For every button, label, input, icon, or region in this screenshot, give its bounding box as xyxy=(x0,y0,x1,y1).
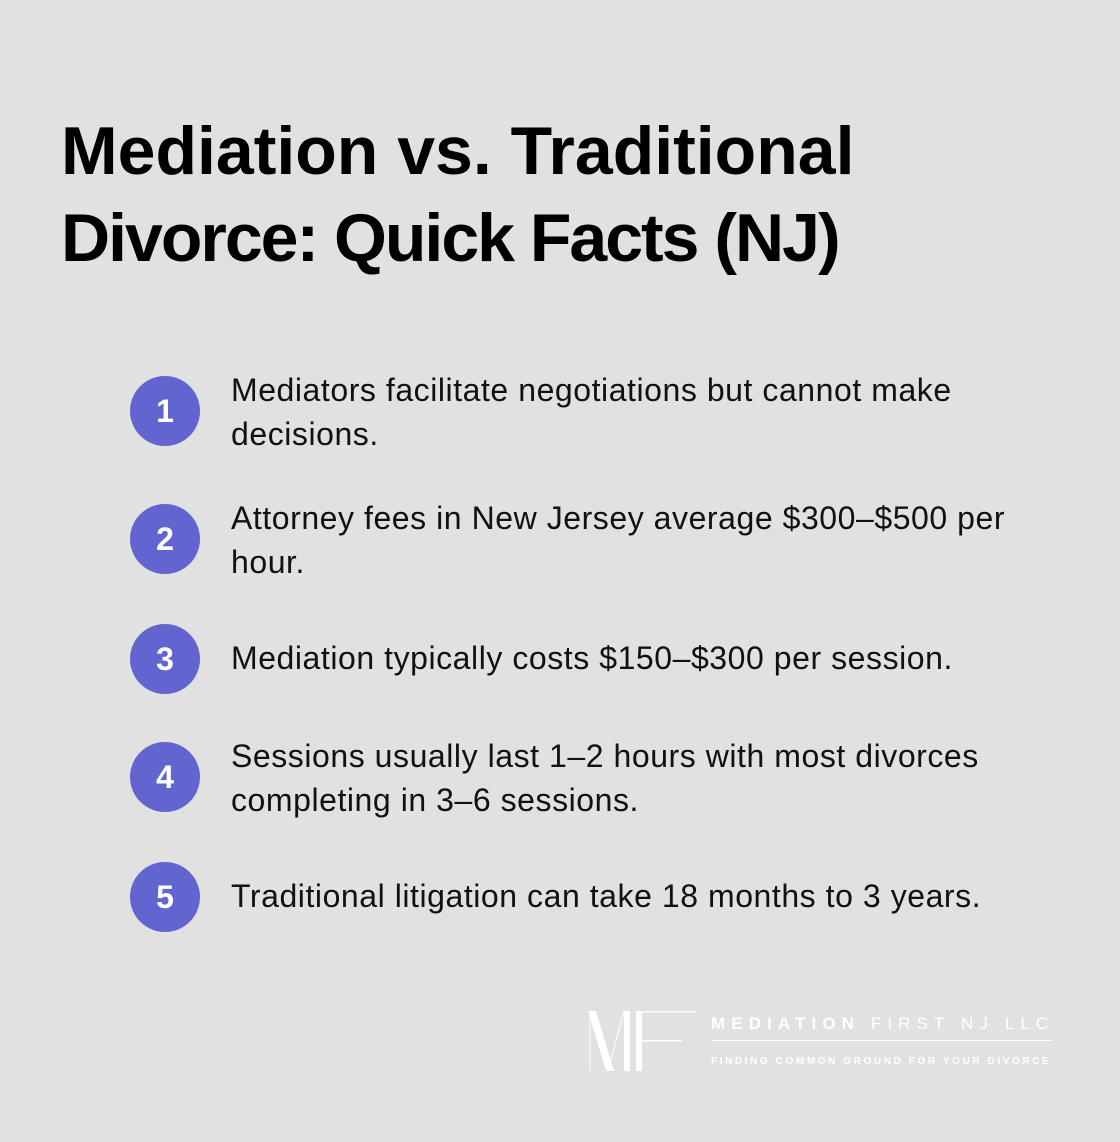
item 5 xyxy=(130,862,981,932)
item 3 xyxy=(130,624,953,694)
logo mark MF xyxy=(588,1011,696,1071)
title: Mediation vs. Traditional xyxy=(61,113,854,189)
item 2 xyxy=(130,500,1005,580)
badge 1: 1 xyxy=(156,393,174,429)
text 1: Mediators facilitate negotiations but cannot make decisions. xyxy=(231,372,952,452)
text 2: Attorney fees in New Jersey average $300–$500 per hour. xyxy=(231,500,1005,580)
logo xyxy=(588,1011,1054,1071)
badge 1 xyxy=(130,376,200,446)
title: Divorce: Quick Facts (NJ) xyxy=(61,200,839,276)
badge 4 xyxy=(130,742,200,812)
badge 2 xyxy=(130,504,200,574)
badge 5 xyxy=(130,862,200,932)
badge 3: 3 xyxy=(156,641,174,677)
item 4 xyxy=(130,738,979,818)
logo text: MEDIATION FIRST NJ LLC xyxy=(711,1014,1054,1033)
title xyxy=(61,113,854,276)
logo: FINDING COMMON GROUND FOR YOUR DIVORCE xyxy=(711,1056,1051,1067)
text 4: Sessions usually last 1–2 hours with most divorces completing in 3–6 sessions. xyxy=(231,738,979,818)
badge 3 xyxy=(130,624,200,694)
text 3: Mediation typically costs $150–$300 per session. xyxy=(231,640,953,676)
item 1 xyxy=(130,372,952,452)
text 5: Traditional litigation can take 18 months to 3 years. xyxy=(231,878,981,914)
badge 4: 4 xyxy=(156,759,174,795)
badge 5: 5 xyxy=(156,879,174,915)
badge 2: 2 xyxy=(156,521,174,557)
